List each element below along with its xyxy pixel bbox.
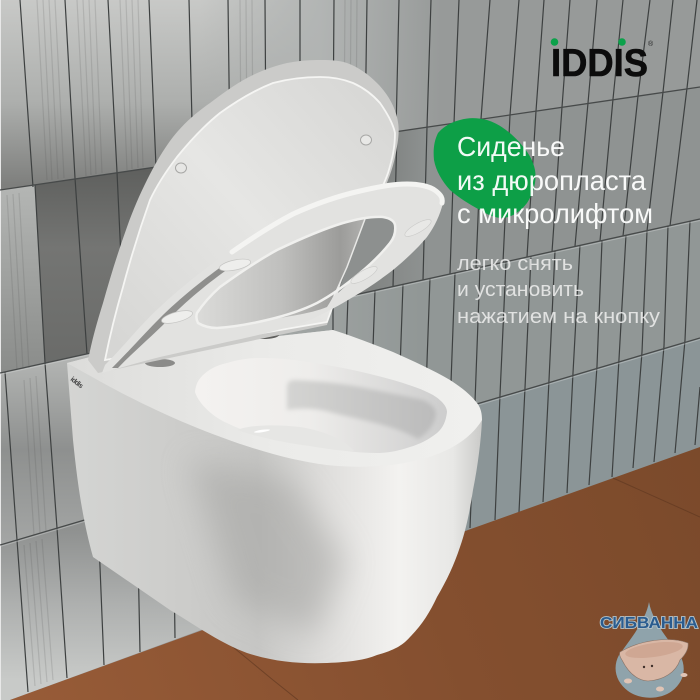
subheading: [457, 253, 660, 328]
iddis logo: IDDIS: [551, 42, 648, 85]
toilet bowl: [67, 330, 482, 663]
watermark name: СИБВАННА: [600, 615, 698, 632]
inner back wall: [287, 380, 436, 439]
subheading: и установить: [457, 279, 584, 301]
bowl opening: [195, 358, 447, 453]
headline: [457, 131, 653, 229]
watermark: sibvanna: [600, 602, 698, 698]
tub feet: [624, 673, 688, 692]
brown floor: [10, 447, 700, 700]
lid seen through opening: [196, 218, 365, 328]
seat ring: [102, 183, 443, 373]
lid knob left: [176, 163, 186, 173]
bumper 1: [160, 308, 194, 326]
wall seen through opening: [338, 216, 395, 293]
subheading: нажатием на кнопку: [457, 306, 660, 328]
toilet seat: [102, 183, 443, 373]
small iddis mark: iddis: [69, 376, 84, 390]
ceramic body: [67, 330, 482, 663]
headline: из дюропласта: [457, 165, 647, 196]
registered mark: ®: [648, 40, 654, 48]
lid outer rim: [88, 60, 399, 373]
seat gray inner strip: [112, 262, 232, 368]
lid edge seen through opening: [334, 219, 365, 296]
bumper 4: [403, 217, 433, 239]
hinges: [145, 331, 279, 367]
bowl deck and rim: [67, 330, 482, 467]
soft body shadow: [190, 460, 345, 635]
raised toilet lid: [88, 60, 399, 373]
headline: с микролифтом: [457, 198, 653, 229]
water highlight: [254, 429, 270, 433]
lid interior: [105, 77, 395, 360]
seat upper edge highlight: [232, 184, 442, 252]
bumper 2: [218, 257, 252, 273]
water drop: [616, 602, 684, 698]
logo green dots: [551, 38, 626, 46]
lid knob right: [360, 135, 372, 145]
view through seat opening: [196, 216, 395, 328]
subheading: легко снять: [457, 253, 573, 275]
bathtub: [620, 640, 688, 681]
tub eyes: [643, 665, 653, 668]
bumper 3: [349, 264, 379, 286]
seat inner lip: [196, 217, 395, 328]
bathtub inner: [624, 639, 684, 661]
green accent blob: [434, 118, 536, 218]
bowl well: [237, 425, 354, 451]
headline: Сиденье: [457, 131, 565, 162]
